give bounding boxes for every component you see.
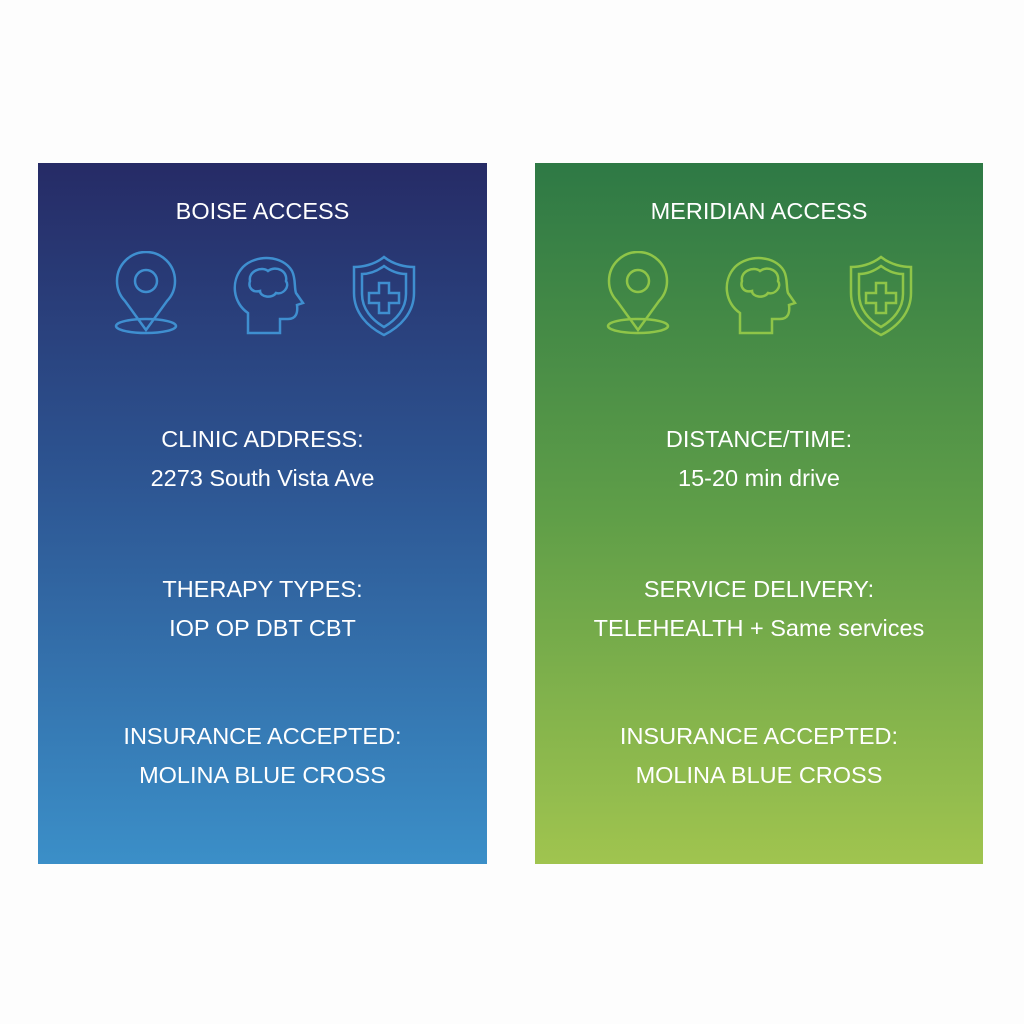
- icons row: meridian: [606, 251, 912, 336]
- icon: brain head: [235, 258, 303, 333]
- panel: meridian access: [535, 163, 983, 864]
- icon: brain head: [727, 258, 795, 333]
- icons row: boise: [114, 251, 416, 336]
- text: insurance: MOLINA BLUE CROSS: [636, 762, 882, 788]
- heading: meridian: MERIDIAN ACCESS: [651, 198, 867, 224]
- icon: location pin: [608, 252, 668, 333]
- text: service delivery: TELEHEALTH + Same services: [594, 615, 924, 641]
- text: therapy types: IOP OP DBT CBT: [169, 615, 356, 641]
- text: insurance: INSURANCE ACCEPTED:: [620, 723, 898, 749]
- text: insurance: INSURANCE ACCEPTED:: [123, 723, 402, 749]
- panel: boise access: [38, 163, 487, 864]
- text: clinic address: [151, 426, 374, 491]
- text: service delivery: [594, 576, 924, 641]
- text: insurance: [123, 723, 402, 788]
- icon: shield cross: [851, 257, 911, 335]
- text: distance: 15-20 min drive: [678, 465, 840, 491]
- icon: shield cross: [354, 257, 414, 335]
- text: therapy types: THERAPY TYPES:: [162, 576, 363, 602]
- text: clinic address: 2273 South Vista Ave: [151, 465, 374, 491]
- text: insurance: MOLINA BLUE CROSS: [139, 762, 386, 788]
- text: clinic address: CLINIC ADDRESS:: [161, 426, 364, 452]
- icon: location pin: [116, 252, 176, 333]
- text: distance: [666, 426, 852, 491]
- heading: boise: BOISE ACCESS: [176, 198, 349, 224]
- text: service delivery: SERVICE DELIVERY:: [644, 576, 874, 602]
- text: distance: DISTANCE/TIME:: [666, 426, 852, 452]
- text: therapy types: [162, 576, 363, 641]
- text: insurance: [620, 723, 898, 788]
